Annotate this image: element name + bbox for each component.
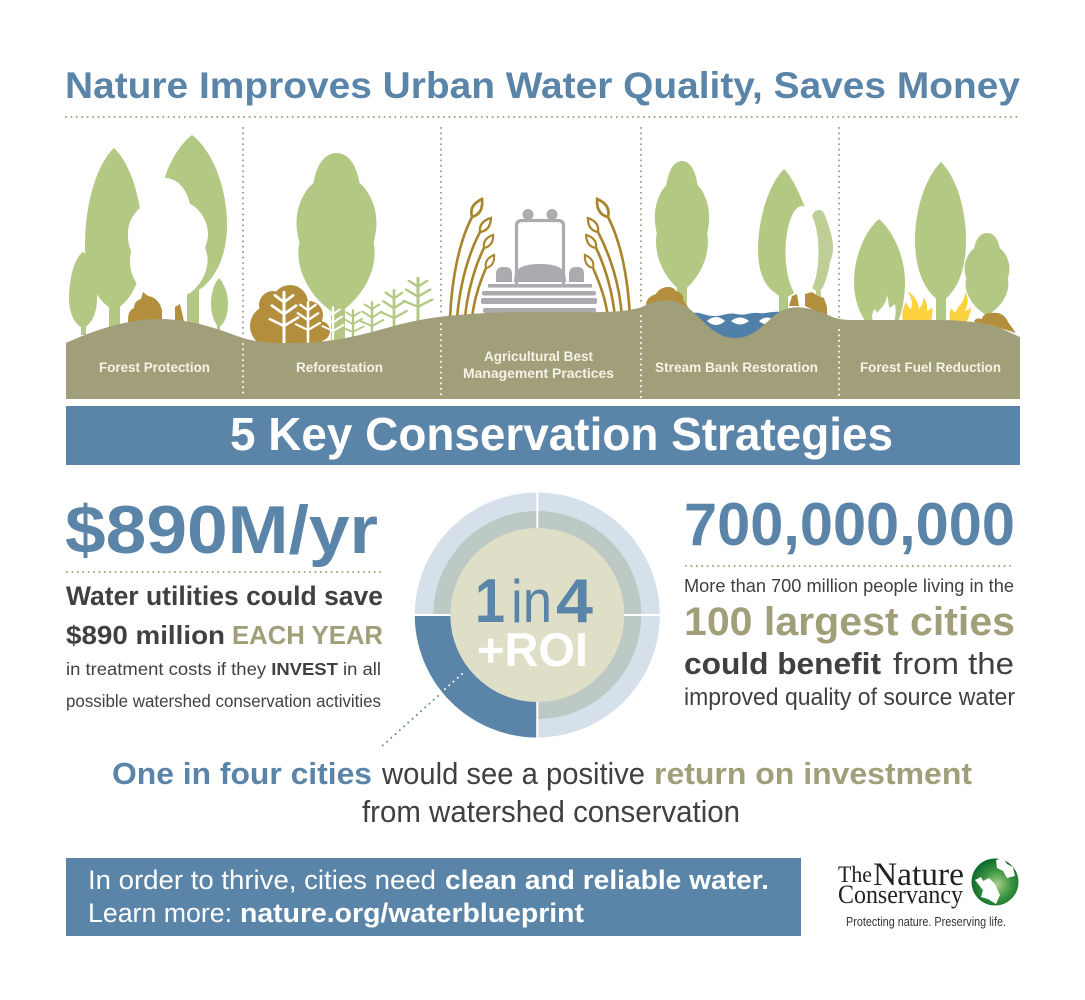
illustration: tractor and wheat	[450, 197, 630, 318]
text: one in four cities statement: return on investment	[654, 756, 972, 791]
text: one in four cities statement	[112, 756, 972, 829]
text: population description: 100 largest cities	[684, 600, 1015, 644]
text: population description: could benefit	[684, 646, 881, 681]
panel: savings statistic	[65, 492, 383, 711]
chart: 1 in 4 donut	[414, 492, 660, 738]
icon: tractor	[481, 209, 597, 313]
panel: call to action: In order to thrive, cities need	[88, 865, 436, 895]
label: Forest Protection: Forest Protection	[99, 360, 210, 375]
label: 1in4: 4	[556, 567, 594, 636]
big number: 700,000,000: 700,000,000	[684, 491, 1015, 558]
icon: shrub	[974, 313, 1016, 333]
text: one in four cities statement: One in four cities	[112, 756, 372, 791]
text: savings description: $890 million	[66, 620, 225, 650]
label: 1in4	[475, 567, 594, 636]
panel: call to action: nature.org/waterblueprint	[240, 898, 584, 928]
label: Stream Bank Restoration: Stream Bank Restoration	[655, 360, 818, 375]
illustration: forest protection trees	[69, 135, 228, 335]
panel: population statistic	[684, 491, 1015, 711]
icon: water	[690, 312, 782, 342]
logo: The Nature Conservancy	[838, 857, 1018, 929]
illustration: forest fuel reduction	[854, 162, 1016, 333]
panel: call to action: Learn more:	[88, 898, 232, 928]
ground band	[66, 300, 1020, 399]
logo: The Nature Conservancy: Nature	[873, 857, 964, 893]
label: 1in4: in	[511, 568, 552, 635]
icon: wheat stalks	[450, 197, 630, 318]
panel: call to action	[66, 858, 801, 936]
text: population description: from the	[893, 646, 1014, 681]
banner: 5 Key Conservation Strategies: 5 Key Conservation Strategies	[230, 408, 893, 460]
label: +ROI: +ROI	[477, 623, 588, 676]
label: Agricultural Best Management Practices: Agricultural Best	[484, 349, 593, 364]
text: population description	[684, 576, 1015, 711]
text: population description: improved quality of source water	[684, 684, 1015, 711]
text: savings description: EACH YEAR	[232, 620, 383, 650]
icon: globe with leaf	[972, 858, 1018, 906]
illustration: reforestation tree, shrub and saplings	[250, 153, 432, 347]
logo: The Nature Conservancy: Protecting nature. Preserving life.	[846, 914, 1006, 929]
label: 1in4: 1	[475, 567, 505, 636]
text: savings description: possible watershed conservation activities	[66, 691, 381, 711]
label: Forest Fuel Reduction: Forest Fuel Reduction	[860, 360, 1001, 375]
text: savings description	[66, 581, 383, 711]
panel: call to action: clean and reliable water.	[445, 865, 769, 895]
logo: The Nature Conservancy: Conservancy	[838, 880, 963, 909]
callout leader line	[381, 674, 462, 747]
banner: 5 Key Conservation Strategies	[66, 406, 1020, 465]
big number: $890M/yr: $890M/yr	[65, 492, 378, 568]
label: Agricultural Best Management Practices	[463, 349, 614, 381]
illustration: stream bank restoration	[646, 161, 833, 342]
logo: The Nature Conservancy: The	[838, 862, 872, 887]
label: Reforestation: Reforestation	[296, 360, 383, 375]
title: Nature Improves Urban Water Quality, Saves Money	[65, 64, 1020, 106]
label: Agricultural Best Management Practices: Management Practices	[463, 366, 614, 381]
icon: flames	[902, 291, 971, 323]
text: savings description: in treatment costs if they INVEST in all	[66, 659, 381, 679]
text: population description: More than 700 million people living in the	[684, 576, 1014, 596]
text: one in four cities statement: from watershed conservation	[362, 794, 740, 829]
text: savings description: Water utilities could save	[66, 581, 383, 611]
text: one in four cities statement: would see a positive	[381, 756, 645, 791]
